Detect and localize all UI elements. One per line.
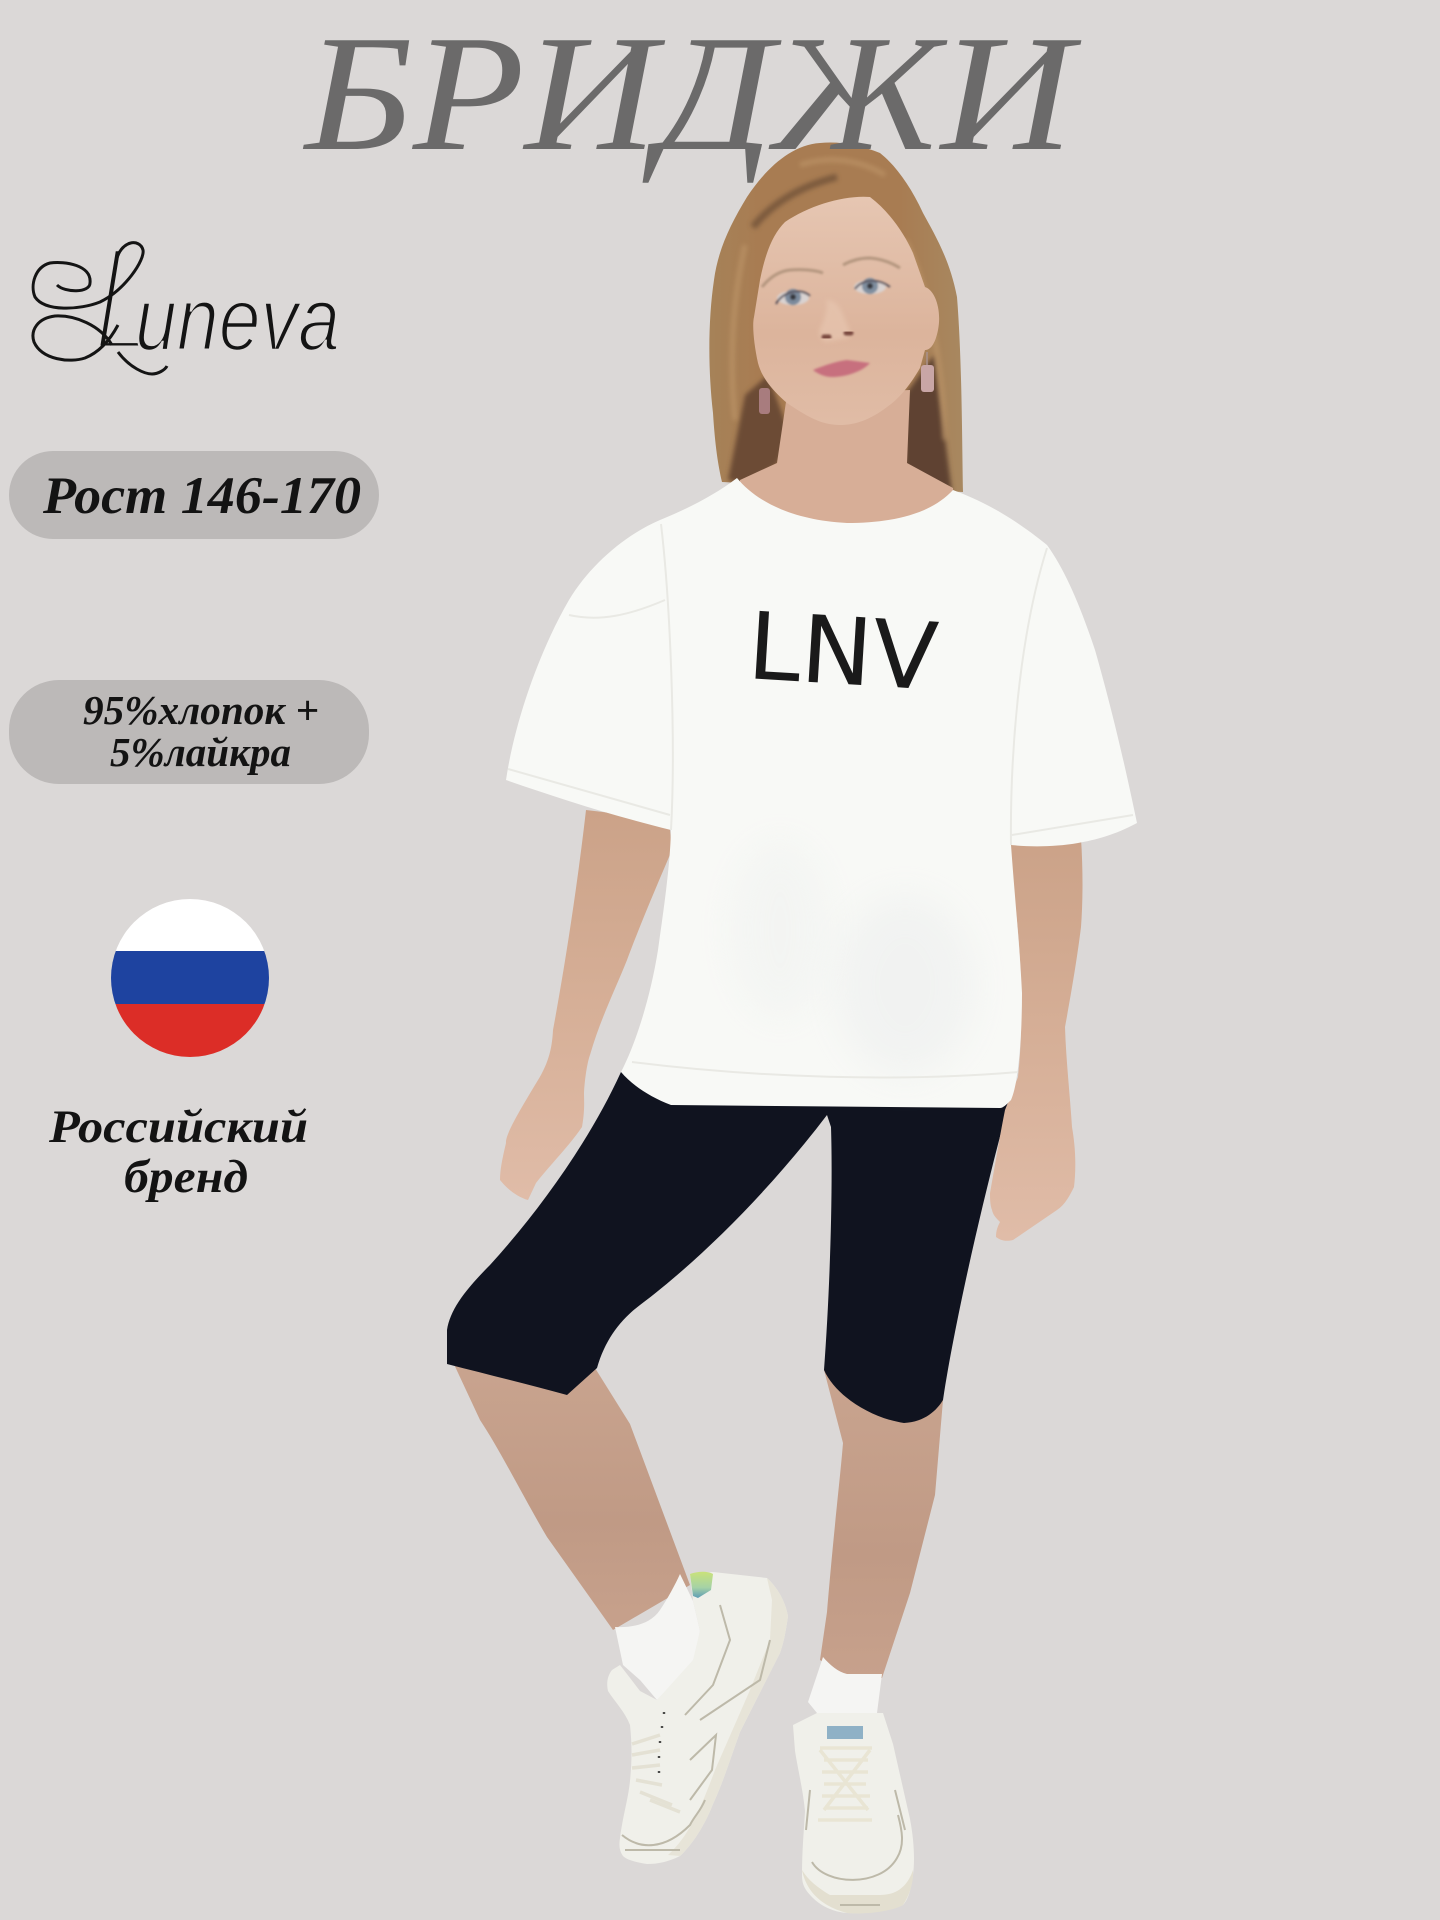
title: БРИДЖИ <box>303 1 1082 185</box>
left sock <box>615 1574 700 1700</box>
shoe eyelets <box>659 1712 664 1773</box>
earrings <box>759 352 934 414</box>
holographic tongue <box>827 1726 863 1739</box>
left leg <box>452 1360 690 1630</box>
icon: russian flag <box>111 899 269 1058</box>
figure: girl in t-shirt and breeches <box>447 142 1137 1913</box>
composition text: 95%хлопок + <box>83 687 319 733</box>
logo: Luneva: uneva <box>135 270 340 370</box>
shorts <box>447 1072 1009 1423</box>
height text: Рост 146-170 <box>42 467 361 525</box>
nose <box>819 300 850 342</box>
composition badge <box>9 680 369 784</box>
shirt print: LNV: LNV <box>745 592 941 712</box>
left shoe <box>607 1572 788 1864</box>
infographic canvas <box>9 40 1137 1913</box>
shoe laces <box>632 1735 680 1812</box>
right shoe <box>793 1713 914 1913</box>
height badge <box>9 451 379 539</box>
eyes <box>776 278 890 305</box>
eyebrows <box>762 258 900 287</box>
right leg <box>820 1370 943 1678</box>
right arm <box>990 838 1082 1241</box>
t-shirt <box>506 478 1137 1108</box>
holographic heel tab <box>690 1572 713 1598</box>
lips <box>813 360 870 377</box>
brand caption: Российский <box>48 1101 308 1153</box>
logo: Luneva: L <box>92 214 162 382</box>
right sock <box>808 1657 882 1713</box>
shoe laces <box>818 1748 872 1820</box>
hair <box>709 142 963 492</box>
brand caption: бренд <box>124 1151 248 1203</box>
composition text: 5%лайкра <box>110 729 291 775</box>
logo: Luneva <box>33 214 340 382</box>
neck <box>740 390 955 535</box>
left arm <box>500 810 672 1200</box>
face <box>753 197 939 425</box>
